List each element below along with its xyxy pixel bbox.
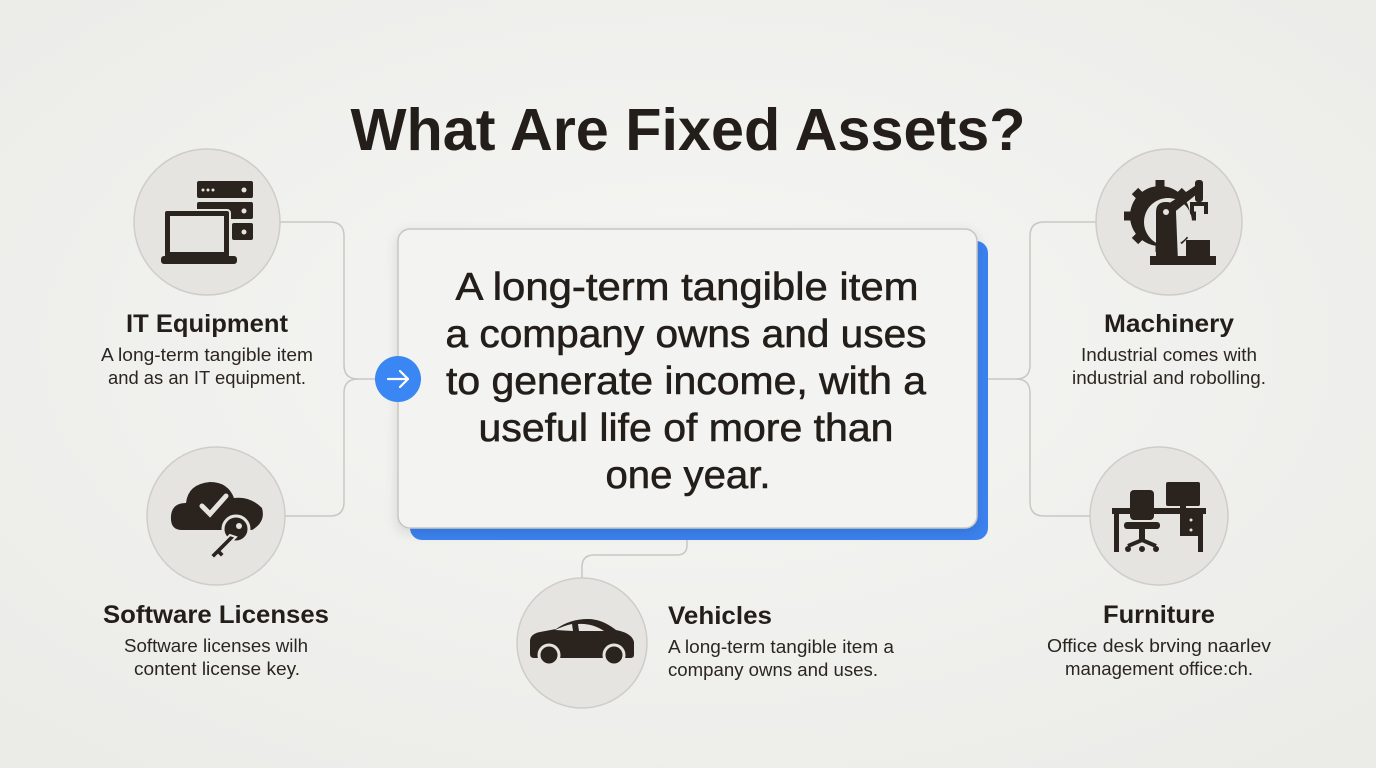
panel: Furniture — [1047, 447, 1271, 679]
panel: Machinery — [1072, 149, 1266, 388]
description: industrial and robolling. — [1072, 368, 1266, 388]
card text: useful life of more than — [478, 407, 894, 450]
connector lines — [280, 222, 1097, 578]
description — [1047, 636, 1271, 679]
icon: computer and server — [161, 181, 253, 264]
description: Software licenses wilh — [124, 636, 308, 656]
panel: Software Licenses — [103, 447, 329, 679]
card text: a company owns and uses — [446, 313, 926, 356]
card text: A long-term tangible item — [456, 266, 918, 309]
title: What Are Fixed Assets? — [350, 97, 1026, 163]
description: company owns and uses. — [668, 660, 878, 680]
heading: Software Licenses — [103, 601, 329, 629]
central card — [398, 229, 988, 540]
icon: car — [530, 619, 634, 665]
icon: cloud with key — [171, 482, 263, 559]
card text: one year. — [606, 454, 770, 497]
description: and as an IT equipment. — [108, 368, 306, 388]
card text: to generate income, with a — [446, 360, 926, 403]
heading: Machinery — [1104, 310, 1234, 338]
card text — [446, 266, 926, 497]
icon: desk, chair and monitor — [1112, 482, 1206, 552]
description: A long-term tangible item — [101, 345, 313, 365]
icon: arrow button — [375, 356, 421, 402]
description — [668, 637, 895, 680]
description — [101, 345, 313, 388]
icon: gear and robot arm — [1124, 180, 1216, 265]
heading: IT Equipment — [126, 310, 289, 338]
description: A long-term tangible item a — [668, 637, 895, 657]
heading: Vehicles — [668, 602, 772, 630]
description: Industrial comes with — [1081, 345, 1257, 365]
description: content license key. — [134, 659, 300, 679]
description — [1072, 345, 1266, 388]
heading: Furniture — [1103, 601, 1215, 629]
panel: Vehicles — [517, 578, 895, 708]
panel: IT Equipment — [101, 149, 313, 388]
description: Office desk brving naarlev — [1047, 636, 1271, 656]
description: management office:ch. — [1065, 659, 1253, 679]
description — [124, 636, 308, 679]
